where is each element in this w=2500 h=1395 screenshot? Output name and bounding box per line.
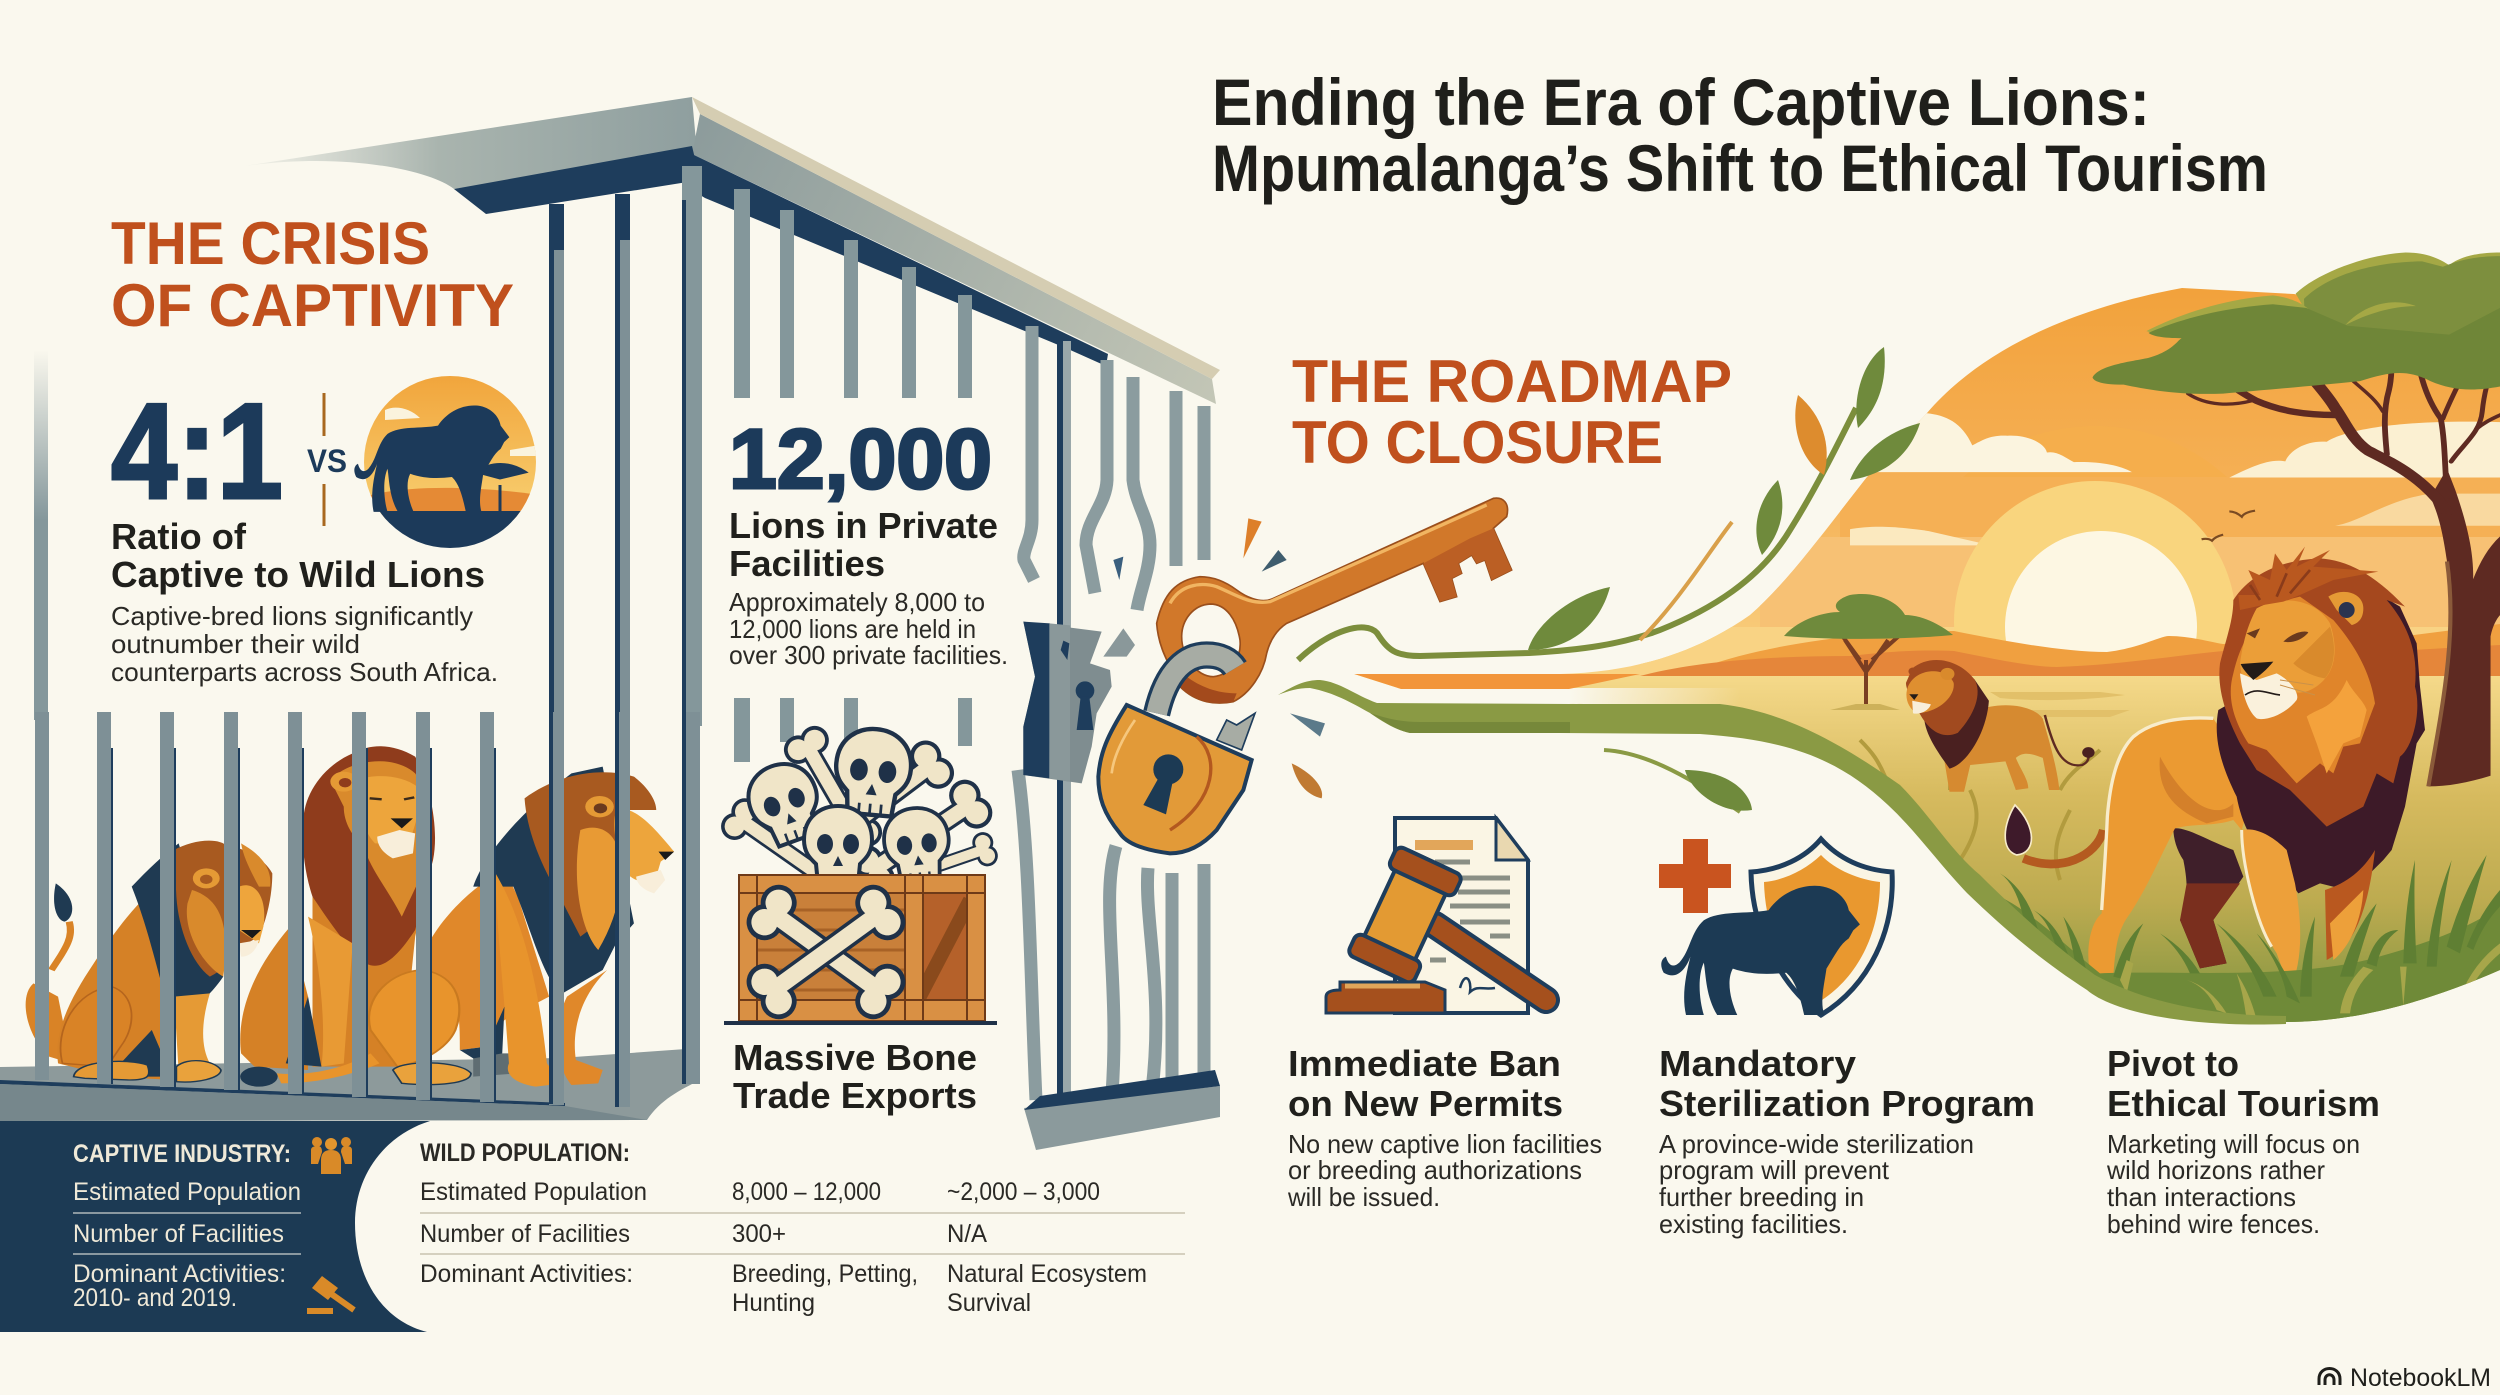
stat: 4:1 ratio: Ratio of [111,516,247,557]
cage structure [34,97,1220,1150]
clouds [1850,413,2132,472]
birds [2202,511,2255,541]
heading: the roadmap to closure [1292,348,1732,476]
step 1: immediate ban: No new captive lion facilities [1288,1129,1602,1159]
big tree trunk and branches [2188,345,2500,786]
stat: 4:1 ratio: VS [307,443,347,479]
dry grass [1860,730,2100,880]
step 2: mandatory sterilization [1659,1043,2035,1239]
face [2240,600,2335,693]
table: wild population comparison: Natural Ecosystem [947,1260,1147,1288]
stat: 4:1 ratio: Captive to Wild Lions [111,554,485,595]
stat: 12,000 lions: 12,000 [729,412,992,506]
heading: the roadmap to closure: TO CLOSURE [1292,409,1663,476]
table: wild population comparison: Number of Facilities [420,1220,630,1248]
shackle [1157,655,1235,713]
table: wild population comparison: ~2,000 – 3,000 [947,1178,1100,1206]
table: wild population comparison: N/A [947,1220,987,1248]
icon: lion silhouette at sunset badge [354,370,540,551]
subheading: massive bone trade exports: Massive Bone [733,1037,977,1078]
panel: savanna landscape [1340,250,2500,1030]
step 2: mandatory sterilization: Sterilization Program [1659,1083,2035,1124]
forelock spikes [2238,547,2378,610]
stat: 12,000 lions: over 300 private facilities. [729,640,1008,670]
key [1157,498,1512,703]
front legs [2325,850,2375,960]
step 2: mandatory sterilization: Mandatory [1659,1043,1856,1084]
three captive lions behind bars [26,746,674,1087]
step 2: mandatory sterilization: further breeding in [1659,1182,1864,1212]
step 2: mandatory sterilization: program will prevent [1659,1155,1890,1185]
stat: 12,000 lions: Approximately 8,000 to [729,587,985,617]
table: wild population comparison: Survival [947,1289,1031,1317]
step 3: pivot to ethical tourism: than interactions [2107,1182,2296,1212]
NotebookLM logo: NotebookLM [2350,1364,2491,1392]
lion right [240,767,674,1087]
step 3: pivot to ethical tourism: Pivot to [2107,1043,2239,1084]
flying shards around the lock [1103,518,1325,798]
subheading: massive bone trade exports [733,1037,977,1116]
icon: broken cage lock plate [1023,622,1112,783]
subheading: massive bone trade exports: Trade Exports [733,1075,977,1116]
lion middle [240,746,435,1070]
icon: crate of lion bones [716,721,1001,1026]
stat: 4:1 ratio: Captive-bred lions significantly [111,601,473,631]
table: wild population comparison: Breeding, Petting, [732,1260,918,1288]
step 3: pivot to ethical tourism: Marketing will focus on [2107,1129,2360,1159]
stat: 12,000 lions: Lions in Private [729,505,998,546]
stat: 12,000 lions: 12,000 lions are held in [729,614,976,644]
step 2: mandatory sterilization: A province-wide sterilization [1659,1129,1974,1159]
step 1: immediate ban: on New Permits [1288,1083,1563,1124]
step 1: immediate ban [1287,1043,1602,1212]
ribbon of grass from lock to savanna [1278,680,1752,812]
green band along the panel edge [1560,704,2286,1025]
title: Mpumalanga’s Shift to Ethical Tourism [1212,131,2268,205]
title [1212,65,2268,205]
step 1: immediate ban: Immediate Ban [1288,1043,1561,1084]
big foreground lion [2005,547,2425,990]
step 3: pivot to ethical tourism: wild horizons rather [2106,1155,2325,1185]
stat: 4:1 ratio: 4:1 [111,375,283,527]
panel: captive industry: Number of Facilities [73,1220,284,1248]
big acacia canopy [2093,252,2500,394]
panel: captive industry [0,1121,430,1332]
tail [2023,830,2103,864]
step 1: immediate ban: will be issued. [1287,1182,1440,1212]
step 3: pivot to ethical tourism: Ethical Tourism [2107,1083,2380,1124]
panel: captive industry: Estimated Population [73,1178,301,1206]
icon: gavel and permit document [1326,818,1546,1013]
ground [1354,676,2500,1026]
sun [1954,481,2234,627]
cage bars in front of lions [35,712,700,1107]
mane [2217,587,2425,893]
small distant lion [1906,660,2095,792]
table: wild population comparison [420,1139,1185,1317]
vine growing from the key [1298,347,1920,660]
table: wild population comparison: 300+ [732,1220,786,1248]
stat: 12,000 lions: Facilities [729,543,885,584]
table: wild population comparison: WILD POPULATION: [420,1139,630,1167]
step 2: mandatory sterilization: existing facilities. [1659,1209,1848,1239]
foreground grass [2000,855,2500,1030]
heading: the crisis of captivity [111,210,514,339]
small acacia [1842,638,1900,704]
table: wild population comparison: 8,000 – 12,000 [732,1178,881,1206]
icon: key and padlock opening [1098,498,1512,853]
body [2088,718,2253,977]
stat: 4:1 ratio: counterparts across South Africa. [111,657,498,687]
lion left [26,841,272,1082]
heading: the crisis of captivity: THE CRISIS [111,210,430,277]
panel: captive industry: CAPTIVE INDUSTRY: [73,1140,291,1168]
table: wild population comparison: Hunting [732,1289,815,1317]
heading: the crisis of captivity: OF CAPTIVITY [111,272,514,339]
panel: captive industry: Dominant Activities: [73,1260,286,1288]
stat: 4:1 ratio [111,375,498,687]
panel: captive industry: 2010- and 2019. [73,1284,237,1312]
padlock body [1098,705,1252,853]
broken stub [1217,713,1255,750]
table: wild population comparison: Dominant Activities: [420,1260,633,1288]
step 1: immediate ban: or breeding authorizations [1288,1155,1582,1185]
stat: 4:1 ratio: outnumber their wild [111,629,360,659]
ear [2328,592,2363,625]
step 3: pivot to ethical tourism [2106,1043,2380,1239]
table: wild population comparison: Estimated Population [420,1178,647,1206]
icon: medical cross and shield with lion [1659,839,1892,1015]
title: Ending the Era of Captive Lions: [1212,65,2150,139]
distant hills [1717,624,2500,667]
heading: the roadmap to closure: THE ROADMAP [1292,348,1732,415]
under-belly and far hind leg [2173,828,2243,968]
stat: 12,000 lions [729,412,1008,670]
step 3: pivot to ethical tourism: behind wire fences. [2107,1209,2320,1239]
floor of the cage [0,1048,700,1121]
